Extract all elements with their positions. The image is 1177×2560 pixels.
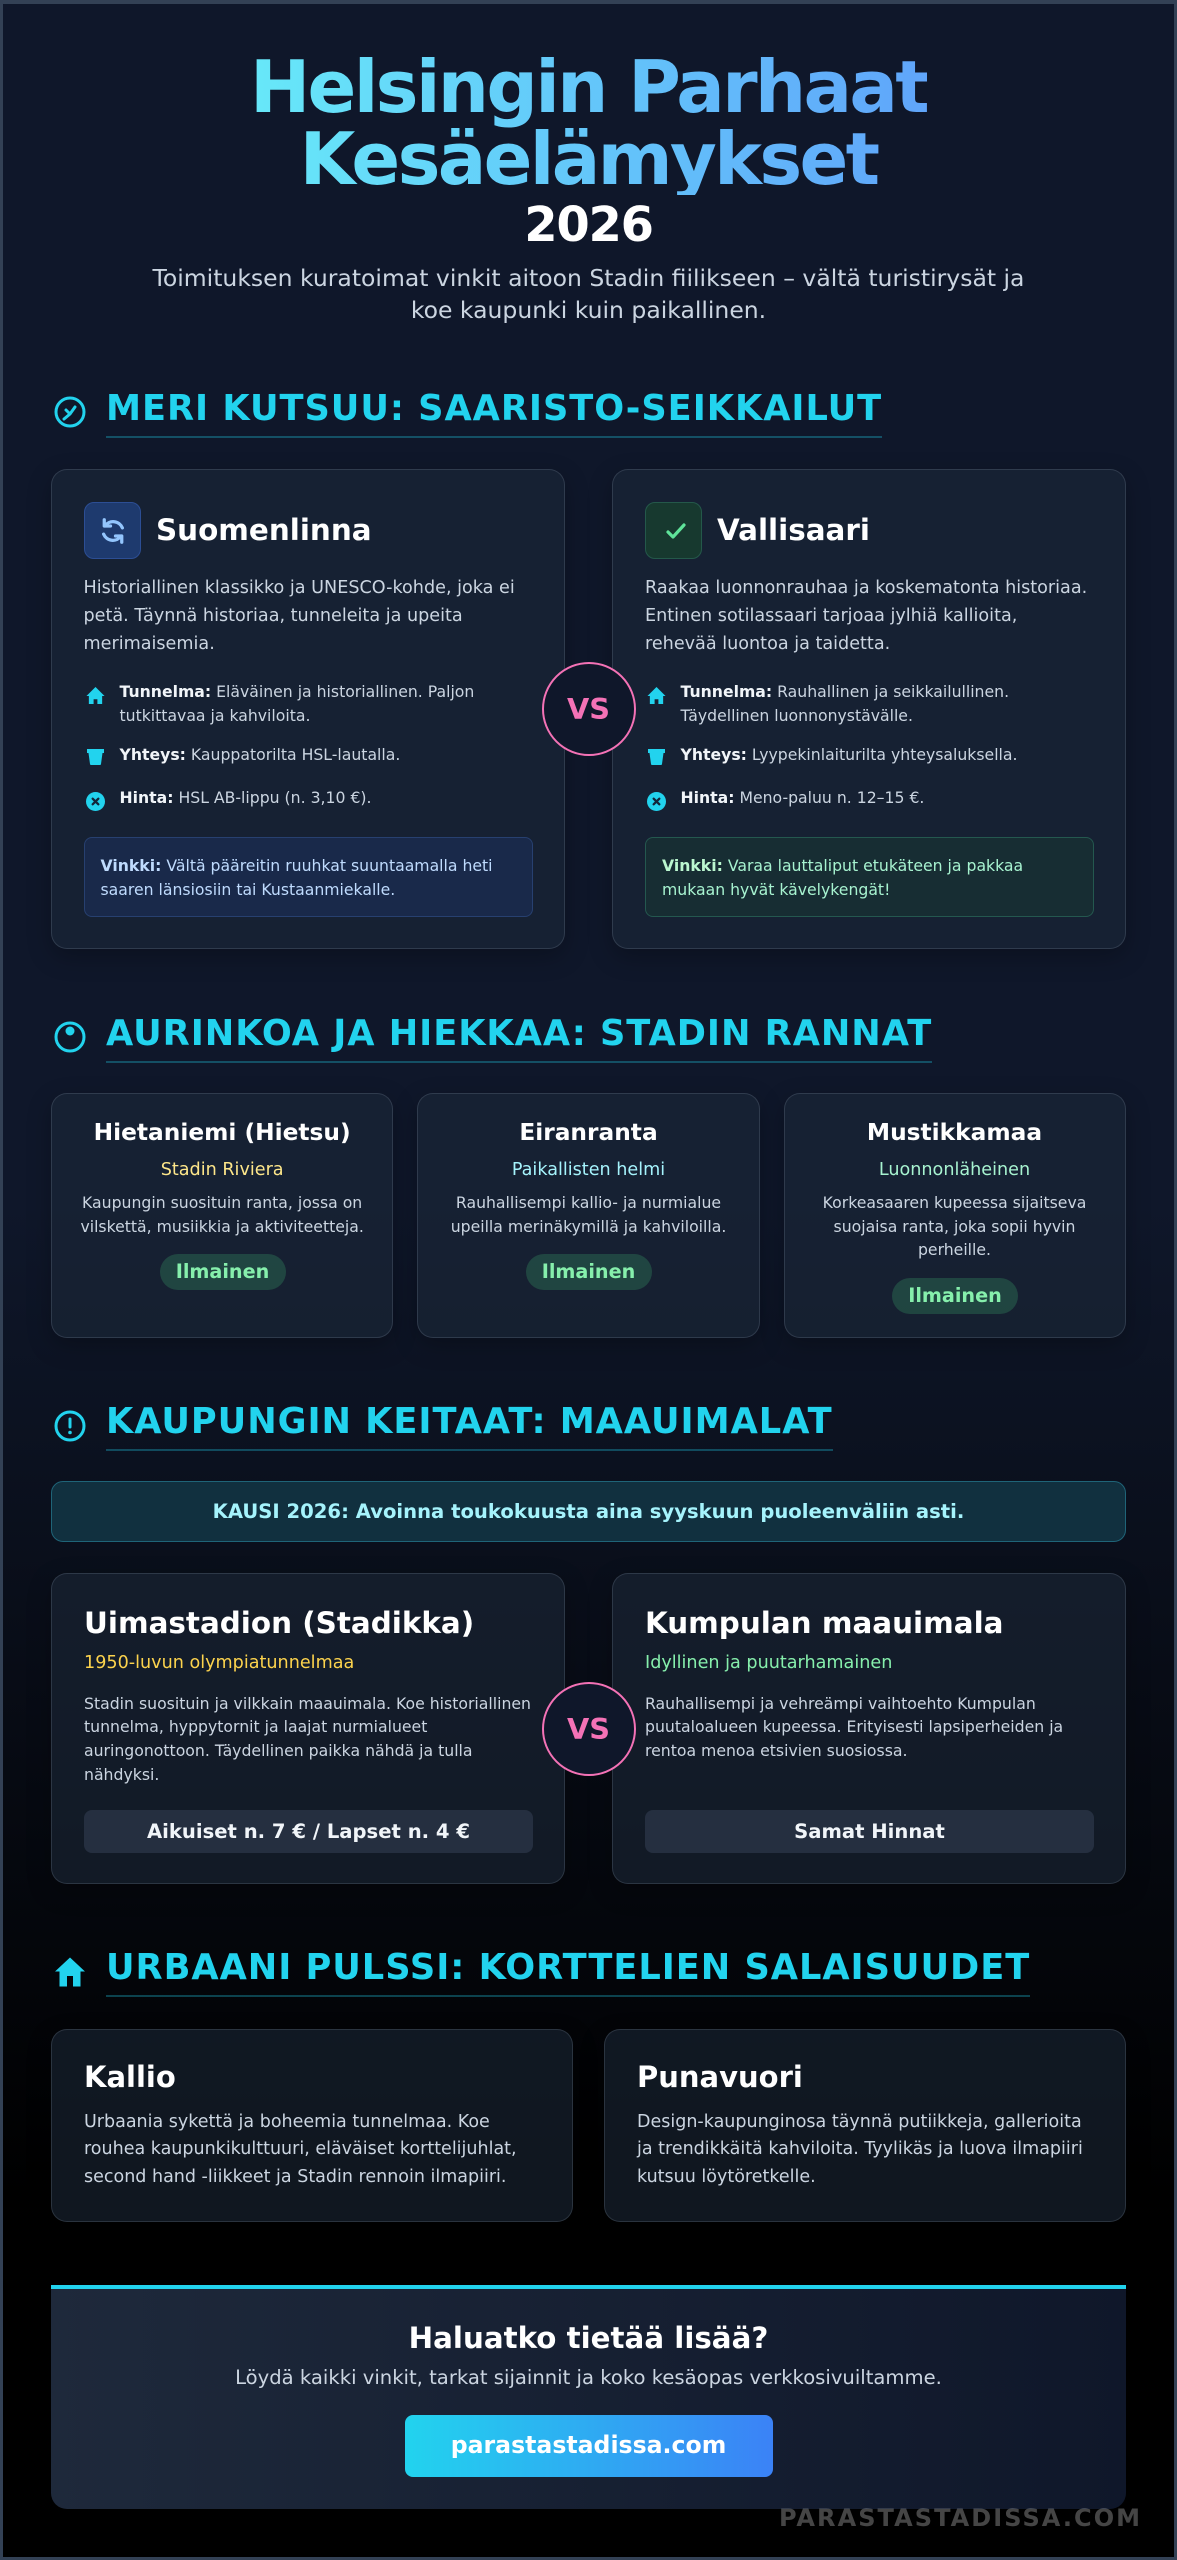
price [84,1810,533,1853]
panel: Kumpula [612,1573,1126,1884]
description: rehevää luontoa ja taidetta. [645,634,890,654]
panel: Hietaniemi [51,1093,393,1338]
subtitle [152,264,1024,324]
tip [84,837,532,917]
beach description: vilskettä, musiikkia ja aktiviteetteja. [80,1217,364,1236]
panel: Mustikkamaa [784,1093,1126,1338]
tip: saaren länsiosiin tai Kustaanmiekalle. [100,880,395,899]
district description: ja trendikkäitä kahviloita. Tyylikäs ja luova ilmapiiri [637,2139,1083,2159]
beach description: suojaisa ranta, joka sopii hyvin [834,1217,1075,1236]
cta button [404,2415,772,2477]
beach description [451,1193,726,1236]
banner: season: KAUSI 2026: Avoinna toukokuusta aina syyskuun puoleenväliin asti. [213,1500,964,1523]
vs badge 2 [542,1682,636,1776]
tip: Vinkki: Varaa lauttaliput etukäteen ja pakkaa [662,856,1023,875]
beach description [80,1193,364,1236]
vs badge 1: VS [567,692,610,726]
tip: mukaan hyvät kävelykengät! [662,880,890,899]
price pill [892,1278,1018,1314]
info: yhteys: Yhteys: Lyypekinlaiturilta yhteysaluksella. [680,745,1017,764]
price pill [160,1254,286,1290]
panel: Vallisaari [612,469,1126,949]
price [645,1810,1094,1853]
price pill: Ilmainen [542,1260,635,1283]
icon: compass section 1 [54,396,86,428]
beach tag: Stadin Riviera [161,1160,284,1180]
description: Raakaa luonnonrauhaa ja koskematonta historiaa. [645,578,1087,598]
call to action panel [51,2285,1126,2509]
info: hinta: Hinta: Meno-paluu n. 12–15 €. [680,788,924,807]
info: tunnelma: tutkittavaa ja kahviloita. [120,706,310,725]
panel: Kallio [51,2029,573,2222]
icon: cup [87,749,104,765]
vs badge 2: VS [567,1712,610,1746]
info: tunnelma: Tunnelma: Eläväinen ja historiallinen. Paljon [120,682,474,701]
cta title: Haluatko tietää lisää? [409,2321,768,2355]
banner: season [51,1481,1126,1542]
panel: Eiranranta [417,1093,760,1338]
district title: Punavuori [637,2060,803,2094]
icon: price [86,792,105,811]
beach tag: Luonnonläheinen [879,1160,1030,1180]
pool tag: Idyllinen ja puutarhamainen [645,1653,892,1673]
description: merimaisemia. [84,634,215,654]
description [645,578,1087,654]
icon: home [648,687,666,704]
district description [84,2112,517,2187]
description: petä. Täynnä historiaa, tunneleita ja upeita [84,606,463,626]
price pill: Ilmainen [176,1260,269,1283]
beach description [823,1193,1086,1259]
district description: Design-kaupunginosa täynnä putiikkeja, gallerioita [637,2112,1082,2132]
subtitle: koe kaupunki kuin paikallinen. [411,296,766,324]
year: 2026 [524,197,653,253]
pool description: nähdyksi. [84,1765,159,1784]
heading: maauimalat: KAUPUNGIN KEITAAT: MAAUIMALAT [106,1401,833,1442]
description: Historiallinen klassikko ja UNESCO-kohde, joka ei [84,578,515,598]
heading: aurinkoa: AURINKOA JA HIEKKAA: STADIN RANNAT [106,1013,932,1054]
info: tunnelma: Tunnelma: Rauhallinen ja seikkailullinen. [680,682,1009,701]
info: yhteys: Yhteys: Kauppatorilta HSL-lautalla. [120,745,400,764]
title: Kesäelämykset [300,116,877,200]
district title: Kallio [84,2060,176,2094]
beach description: upeilla merinäkymillä ja kahviloilla. [451,1217,726,1236]
district description: kutsuu löytöretkelle. [637,2167,816,2187]
price pill: Ilmainen [908,1284,1002,1307]
pool tag: 1950-luvun olympiatunnelmaa [84,1653,354,1673]
beach description: perheille. [918,1240,991,1259]
watermark: PARASTASTADISSA.COM [779,2504,1142,2532]
icon: home section 4 [55,1958,85,1986]
pool description [84,1694,531,1784]
pool description: tunnelma, hyppytornit ja laajat nurmialueet [84,1717,427,1736]
cta text: Löydä kaikki vinkit, tarkat sijainnit ja koko kesäopas verkkosivuiltamme. [235,2366,942,2389]
icon: alert [54,1410,86,1442]
pool description [645,1694,1063,1760]
info: tunnelma [680,682,1009,725]
beach description: Kaupungin suosituin ranta, jossa on [82,1193,362,1212]
vs badge 1 [542,662,636,756]
info: tunnelma: Täydellinen luonnonystävälle. [680,706,913,725]
pool description: puutaloalueen kupeessa. Erityisesti lapsiperheiden ja [645,1717,1063,1736]
card title: Vallisaari [717,513,870,547]
icon: price [647,792,666,811]
icon: check [645,502,702,559]
district description: second hand -liikkeet ja Stadin rennoin ilmapiiri. [84,2167,506,2187]
district description: Urbaania sykettä ja boheemia tunnelmaa. Koe [84,2112,490,2132]
icon: home [86,687,104,704]
pool description: rentoa menoa etsivien suosiossa. [645,1741,907,1760]
cta button: parastastadissa.com [451,2431,726,2459]
pool description: Stadin suosituin ja vilkkain maauimala. Koe historiallinen [84,1694,531,1712]
icon: refresh [84,502,140,559]
description [84,578,515,654]
info: tunnelma [120,682,474,725]
tip: Vinkki: Vältä pääreitin ruuhkat suuntaamalla heti [100,856,493,875]
beach description: Korkeasaaren kupeessa sijaitseva [823,1193,1086,1212]
district description: rouhea kaupunkikulttuuri, eläväiset korttelijuhlat, [84,2139,517,2159]
price: Samat Hinnat [794,1820,945,1843]
heading: meri kutsuu: MERI KUTSUU: SAARISTO-SEIKKAILUT [106,388,882,429]
title [250,44,927,200]
title: Helsingin Parhaat [250,44,927,128]
beach description: Rauhallisempi kallio- ja nurmialue [456,1193,721,1212]
tip [645,837,1094,917]
beach title: Eiranranta [519,1119,658,1146]
price pill [526,1254,652,1290]
info: hinta: Hinta: HSL AB-lippu (n. 3,10 €). [120,788,372,807]
panel: Suomenlinna [51,469,564,949]
heading: urbaani pulssi: URBAANI PULSSI: KORTTELIEN SALAISUUDET [106,1947,1030,1988]
pool title: Uimastadion (Stadikka) [84,1606,474,1640]
panel: Punavuori [604,2029,1126,2222]
icon: sun [54,1022,86,1052]
icon: cup [648,749,665,765]
panel: Uimastadion [51,1573,564,1884]
header [152,44,1024,324]
price: Aikuiset n. 7 € / Lapset n. 4 € [147,1820,470,1843]
pool description: auringonottoon. Täydellinen paikka nähdä ja tulla [84,1741,473,1760]
card title: Suomenlinna [156,513,372,547]
district description [636,2112,1083,2187]
subtitle: Toimituksen kuratoimat vinkit aitoon Stadin fiilikseen – vältä turistirysät ja [153,264,1024,292]
beach title: Mustikkamaa [867,1119,1042,1146]
pool description: Rauhallisempi ja vehreämpi vaihtoehto Kumpulan [645,1694,1036,1712]
pool title: Kumpulan maauimala [645,1606,1004,1640]
description: Entinen sotilassaari tarjoaa jylhiä kallioita, [645,606,1017,626]
beach tag: Paikallisten helmi [512,1160,665,1180]
beach title: Hietaniemi (Hietsu) [94,1119,351,1146]
